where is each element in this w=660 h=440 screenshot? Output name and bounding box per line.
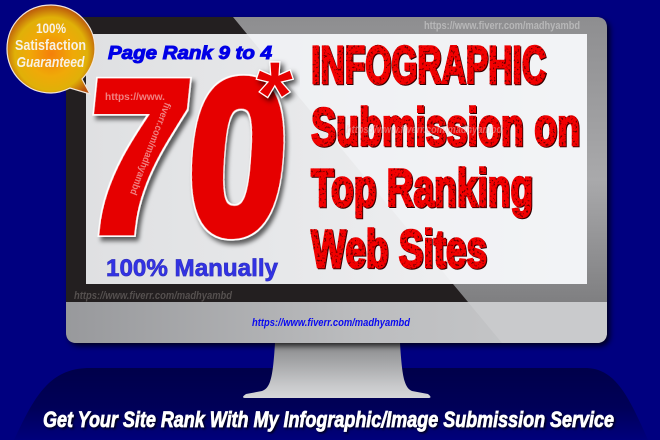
big number seven: 7 (75, 39, 197, 275)
page rank label: Page Rank 9 to 4 (108, 43, 272, 63)
watermark along seven stem: fiverr.com/madhyambd (127, 101, 172, 196)
bottom dark banner (14, 368, 648, 440)
screen glare (247, 34, 587, 284)
watermark on heading: https://www.fiverr.com/madhyambd (346, 124, 502, 136)
heading line 4: Web Sites (311, 220, 487, 279)
big number zero: 0 (181, 36, 295, 278)
chin glare (468, 302, 607, 343)
heading (311, 36, 580, 279)
dark bezel (66, 17, 468, 302)
monitor chin (66, 302, 607, 343)
watermark: lower bezel: https://www.fiverr.com/madhyambd (74, 290, 232, 302)
monitor (66, 17, 607, 343)
satisfaction badge (7, 5, 95, 94)
heading line 3: Top Ranking (311, 159, 533, 218)
badge text line 3: Guaranteed (16, 54, 85, 71)
badge text line 2: Satisfaction (15, 37, 86, 54)
monitor frame (66, 17, 607, 343)
monitor stand (243, 343, 430, 398)
100% manually label: 100% Manually (106, 255, 279, 282)
watermark: top bezel: https://www.fiverr.com/madhyambd (424, 20, 580, 32)
badge text line 1: 100% (36, 20, 66, 36)
watermark on seven top: https://www. (105, 92, 165, 103)
watermark: chin link: https://www.fiverr.com/madhyambd (252, 317, 410, 329)
screen (86, 34, 587, 284)
asterisk: * (256, 42, 294, 149)
badge shape (7, 5, 95, 94)
